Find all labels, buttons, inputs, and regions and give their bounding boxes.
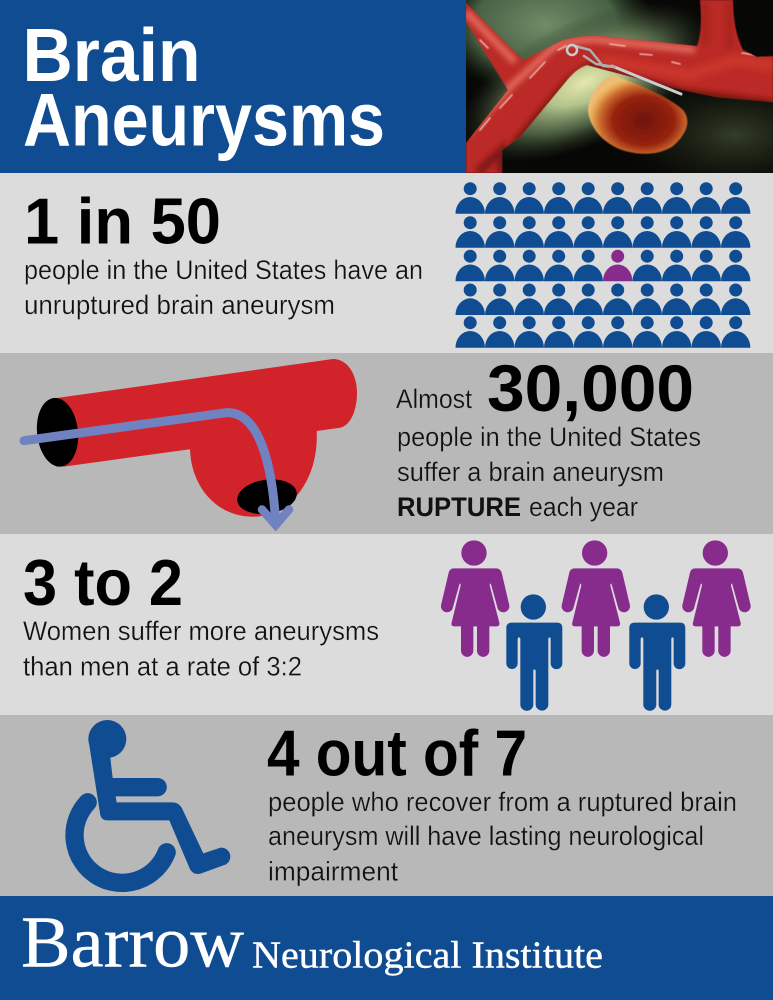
statistic: almost 30,000: 30,000 xyxy=(487,351,694,425)
icons: three women and two men xyxy=(441,540,751,711)
icon: wheelchair user xyxy=(75,720,230,883)
title banner xyxy=(0,0,466,173)
icon: woman xyxy=(682,540,751,657)
band: 1 in 50 xyxy=(0,173,773,353)
logo wordmark xyxy=(21,902,603,982)
title xyxy=(22,13,385,162)
statistic: 3 to 2: 3 to 2 xyxy=(23,546,183,619)
description: lasting impairment: people who recover from a ruptured brain xyxy=(268,787,737,817)
description: unruptured prevalence: people in the United States have an xyxy=(24,255,423,285)
band: 3 to 2 xyxy=(0,534,773,715)
description: lasting impairment xyxy=(268,787,737,886)
icon: man xyxy=(506,594,562,711)
description: yearly ruptures: each year xyxy=(529,492,638,522)
band: 30,000 ruptures xyxy=(0,351,773,534)
description: women versus men xyxy=(23,616,379,682)
statistic: almost 30,000: Almost xyxy=(396,384,472,414)
statistic: 1 in 50: 1 in 50 xyxy=(24,184,221,258)
logo wordmark: Neurological Institute xyxy=(252,934,603,976)
arrow: blood flow xyxy=(24,413,289,525)
statistic: 4 out of 7: 4 out of 7 xyxy=(267,716,527,790)
description: yearly ruptures: RUPTURE xyxy=(397,492,521,522)
title: Brain xyxy=(22,13,200,97)
statistic: almost 30,000 xyxy=(396,351,694,425)
description: yearly ruptures: people in the United States xyxy=(397,422,701,452)
description: unruptured prevalence xyxy=(24,255,423,320)
aneurysm sac xyxy=(588,75,687,154)
description: lasting impairment: aneurysm will have lasting neurological xyxy=(268,821,704,851)
aneurysm clip xyxy=(567,45,681,94)
description: yearly ruptures: suffer a brain aneurysm xyxy=(397,457,664,487)
title: Aneurysms xyxy=(23,78,385,162)
description: lasting impairment: impairment xyxy=(268,856,398,886)
footer: Barrow Neurological Institute xyxy=(0,896,773,1000)
icon grid: fifty people, one highlighted xyxy=(456,182,750,348)
description: women versus men: than men at a rate of 3:2 xyxy=(23,652,302,682)
diagram: ruptured vessel with blood flow arrow xyxy=(24,359,357,525)
description: yearly ruptures xyxy=(397,422,701,522)
logo wordmark: Barrow xyxy=(21,902,244,982)
photo: clipped aneurysm xyxy=(466,0,773,173)
band: 4 out of 7 xyxy=(0,715,773,896)
description: women versus men: Women suffer more aneurysms xyxy=(23,616,379,646)
icon: woman xyxy=(562,540,630,657)
icon: man xyxy=(629,594,685,711)
description: unruptured prevalence: unruptured brain aneurysm xyxy=(24,290,335,320)
icon: woman xyxy=(441,540,509,657)
